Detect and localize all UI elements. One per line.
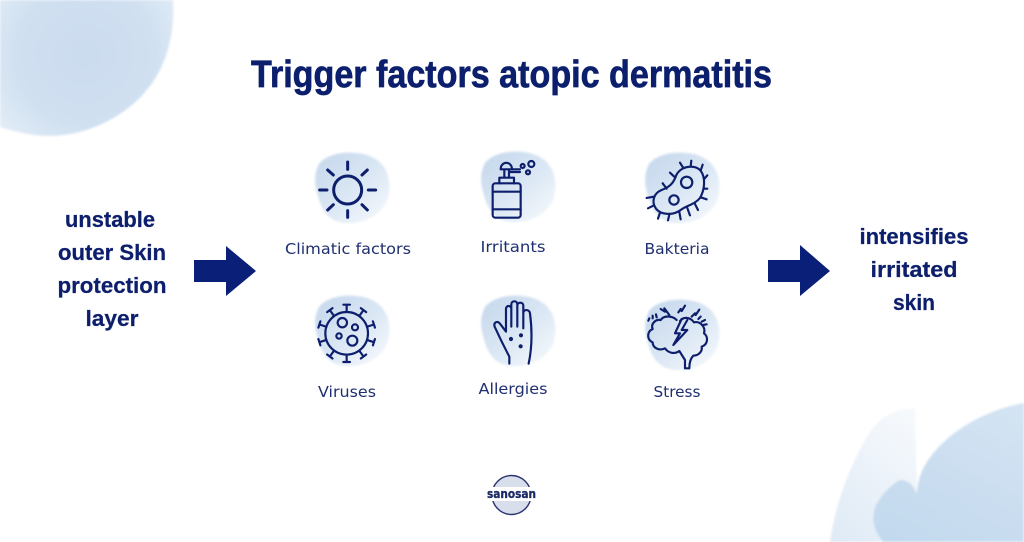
text block: intensifies irritated skin: skin: [893, 290, 935, 315]
text block: unstable outer skin protection layer: [58, 207, 166, 331]
watercolor blob: bottom right: [830, 403, 1024, 542]
factor: allergies: Allergies: [478, 380, 548, 398]
factor: climatic factors: [285, 153, 411, 258]
logo: sanosan: sanosan: [487, 487, 536, 501]
factor: allergies: [478, 296, 555, 398]
logo: sanosan: [486, 476, 537, 514]
watercolor blob: top left: [0, 0, 173, 136]
factor: viruses: Viruses: [318, 383, 376, 401]
factor: bakteria: Bakteria: [644, 240, 710, 258]
factor: irritants: [480, 152, 555, 256]
text block: unstable outer skin protection layer: protection: [58, 273, 166, 298]
arrow: right: [768, 245, 830, 296]
factor: irritants: Irritants: [480, 238, 546, 256]
factor: climatic factors: Climatic factors: [285, 240, 411, 258]
text block: intensifies irritated skin: intensifies: [860, 224, 968, 249]
text block: unstable outer skin protection layer: layer: [86, 306, 139, 331]
factor: viruses: [315, 296, 389, 401]
factor: stress: [645, 300, 719, 401]
text block: intensifies irritated skin: [860, 224, 968, 315]
title: Trigger factors atopic dermatitis: [251, 54, 772, 96]
text block: unstable outer skin protection layer: outer Skin: [58, 240, 166, 265]
arrow: left: [194, 246, 256, 296]
factor: stress: Stress: [654, 383, 700, 401]
text block: intensifies irritated skin: irritated: [870, 257, 958, 282]
text block: unstable outer skin protection layer: unstable: [65, 207, 155, 232]
factor: bakteria: [644, 153, 719, 258]
